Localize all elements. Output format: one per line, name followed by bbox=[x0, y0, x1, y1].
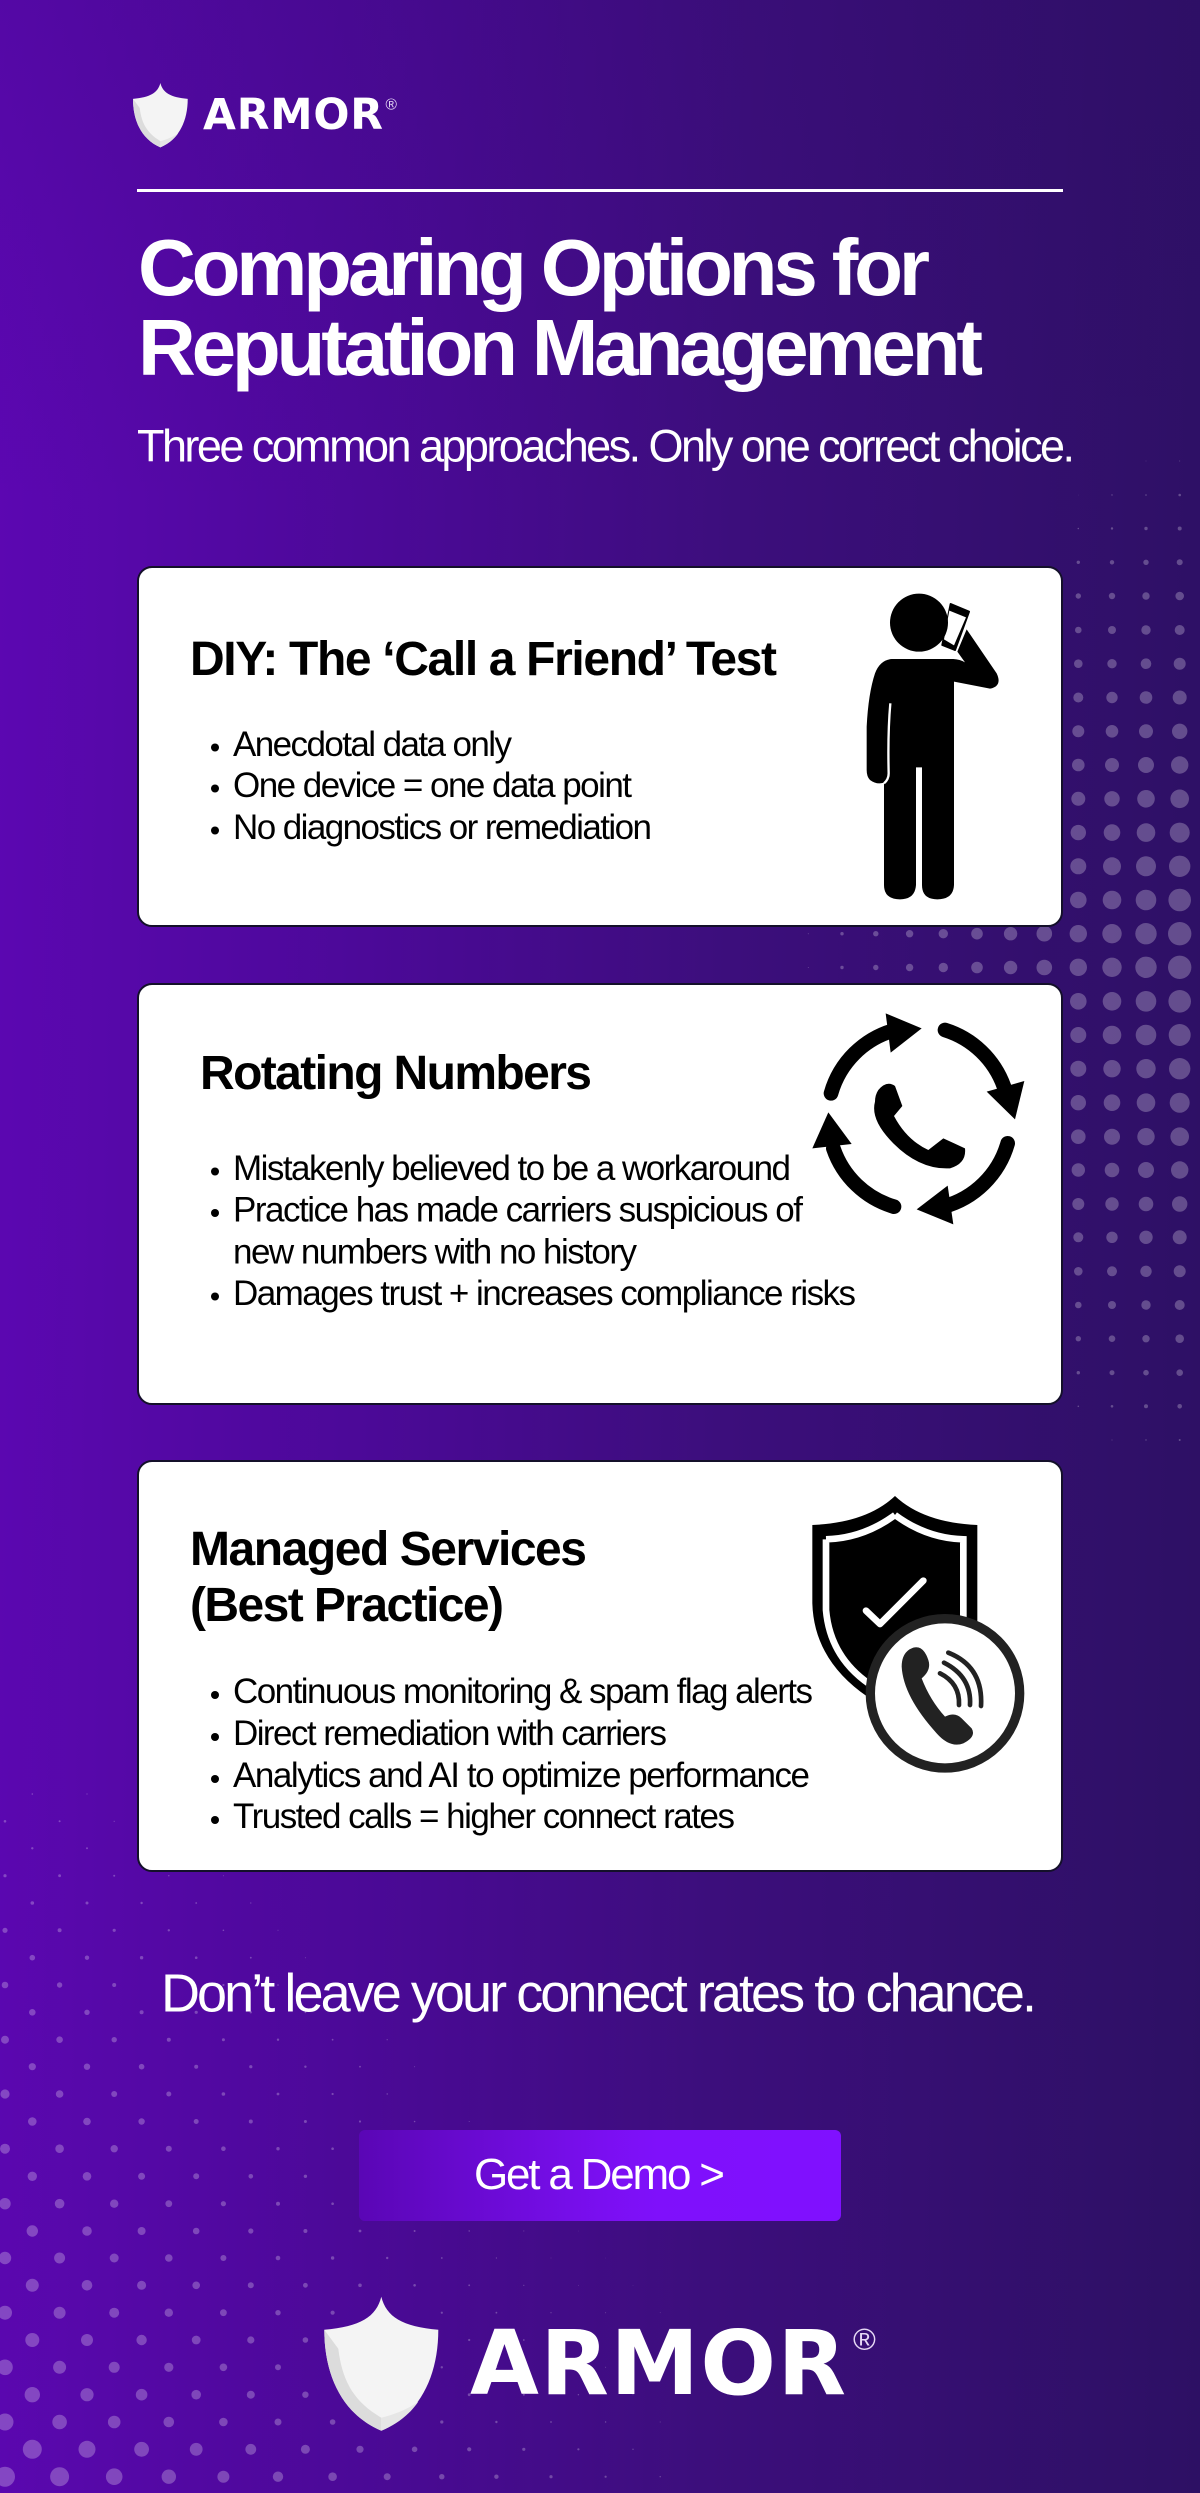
top logo wordmark: ARMOR bbox=[203, 91, 383, 140]
icon: bottom shield bbox=[324, 2297, 438, 2431]
heading: Managed Services: (Best Practice) bbox=[190, 1579, 504, 1632]
bullet list: Rotating Numbers bbox=[211, 1149, 856, 1313]
card background bbox=[138, 984, 1062, 1404]
bullet list: Managed Services: Direct remediation with carriers bbox=[233, 1714, 667, 1753]
icon: shield with check and phone bbox=[812, 1496, 1020, 1768]
icon: top shield bbox=[133, 83, 188, 147]
bullet list: Managed Services: Continuous monitoring & spam flag alerts bbox=[233, 1672, 813, 1711]
halftone dots: right side bbox=[808, 460, 1191, 1441]
heading: Managed Services: Managed Services bbox=[190, 1523, 587, 1576]
subtitle: Three common approaches. Only one correct choice. bbox=[137, 421, 1075, 472]
title: Reputation Management bbox=[138, 303, 983, 392]
bullet list: Managed Services: Analytics and AI to optimize performance bbox=[233, 1756, 810, 1795]
bullet list: DIY: One device = one data point bbox=[233, 766, 632, 805]
bullet list: Rotating Numbers: Practice has made carriers suspicious of bbox=[233, 1191, 803, 1230]
bullet list: DIY: No diagnostics or remediation bbox=[233, 808, 652, 847]
header divider bbox=[137, 189, 1063, 192]
bottom logo: Armor bbox=[324, 2297, 876, 2431]
halftone dots: bottom left bbox=[0, 1793, 661, 2487]
panel: DIY bbox=[138, 567, 1062, 926]
bullet list: DIY: Anecdotal data only bbox=[233, 725, 512, 764]
button: Get a Demo: Get a Demo > bbox=[474, 2150, 725, 2199]
card background bbox=[138, 1461, 1062, 1871]
title bbox=[138, 223, 983, 392]
panel: Rotating Numbers bbox=[138, 984, 1062, 1404]
bullet list: Rotating Numbers: Damages trust + increases compliance risks bbox=[233, 1274, 856, 1313]
bullet list: Managed Services: Trusted calls = higher connect rates bbox=[233, 1797, 735, 1836]
registered mark: ® bbox=[853, 2322, 876, 2357]
call to action text: Don’t leave your connect rates to chance. bbox=[161, 1964, 1037, 2024]
registered mark: ® bbox=[386, 96, 398, 114]
icon: rotating arrows with phone bbox=[812, 1013, 1024, 1224]
card background bbox=[138, 567, 1062, 926]
heading: DIY: DIY: The ‘Call a Friend’ Test bbox=[190, 633, 777, 686]
bullet list: DIY bbox=[211, 725, 652, 847]
bullet list: Rotating Numbers: new numbers with no history bbox=[233, 1232, 638, 1271]
panel: Managed Services bbox=[138, 1461, 1062, 1871]
top logo: Armor bbox=[133, 83, 398, 147]
icon: person on phone bbox=[867, 594, 999, 899]
heading: Managed Services bbox=[190, 1523, 587, 1632]
title: Comparing Options for bbox=[138, 223, 930, 312]
bullet list: Managed Services bbox=[211, 1672, 813, 1836]
bottom logo wordmark: ARMOR bbox=[470, 2311, 846, 2415]
heading: Rotating Numbers: Rotating Numbers bbox=[200, 1047, 592, 1100]
bullet list: Rotating Numbers: Mistakenly believed to be a workaround bbox=[233, 1149, 791, 1188]
button: Get a Demo bbox=[359, 2130, 841, 2221]
